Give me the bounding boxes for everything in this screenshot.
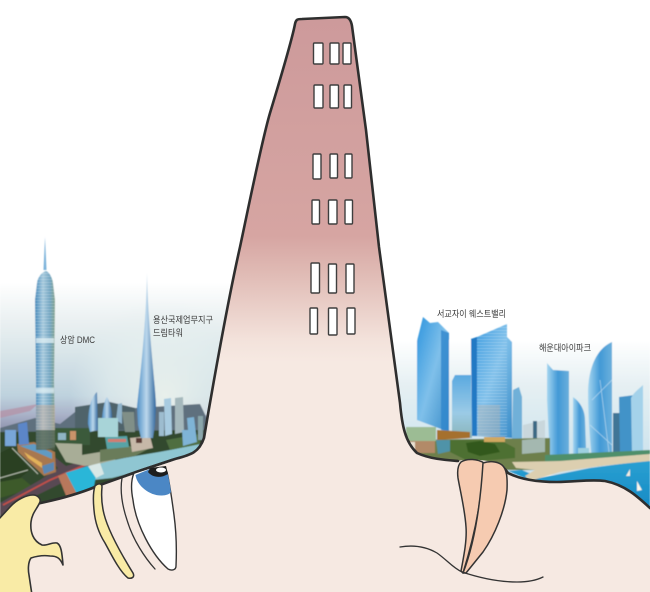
sailboats — [626, 469, 630, 476]
left sky — [0, 282, 250, 447]
eyeball — [132, 468, 176, 570]
label: Sangam DMC: 상암 DMC — [60, 334, 95, 345]
ground — [402, 438, 550, 470]
pupil — [148, 466, 168, 477]
nose — [458, 459, 507, 573]
ear — [0, 495, 63, 592]
eye — [121, 466, 176, 570]
highlight — [156, 468, 166, 472]
beach and sea — [508, 460, 650, 510]
Haeundae towers — [613, 413, 620, 457]
windows — [310, 43, 355, 335]
small buildings — [5, 430, 16, 446]
left nostril lobe — [458, 459, 484, 573]
right sky — [395, 340, 650, 475]
mouth line — [400, 546, 543, 582]
upper eyelid crease — [121, 478, 155, 569]
label: Seogyo Xi West Valley: 서교자이 웨스트밸리 — [437, 308, 506, 319]
photo: Sangam DMC and Yongsan city skyline — [0, 237, 260, 525]
iris — [136, 469, 171, 496]
right nostril lobe — [463, 462, 507, 573]
mall — [17, 442, 56, 476]
left plaza and river — [55, 443, 120, 466]
label: Haeundae I-Park: 해운대아이파크 — [539, 343, 591, 353]
label: Yongsan Dream Tower — [153, 315, 213, 338]
label: Yongsan Dream Tower: 용산국제업무지구 — [153, 315, 213, 325]
Dream tower cluster — [88, 392, 98, 432]
photo: Seogyo Xi West Valley and Haeundae I-Park skyline — [395, 317, 650, 510]
Seogyo towers — [512, 387, 522, 440]
eyebrow strip — [93, 484, 134, 578]
left ground — [0, 430, 205, 525]
Sangam DMC tower — [44, 237, 46, 270]
lid line over eye — [125, 460, 172, 476]
label: Yongsan Dream Tower: 드림타워 — [153, 327, 183, 338]
